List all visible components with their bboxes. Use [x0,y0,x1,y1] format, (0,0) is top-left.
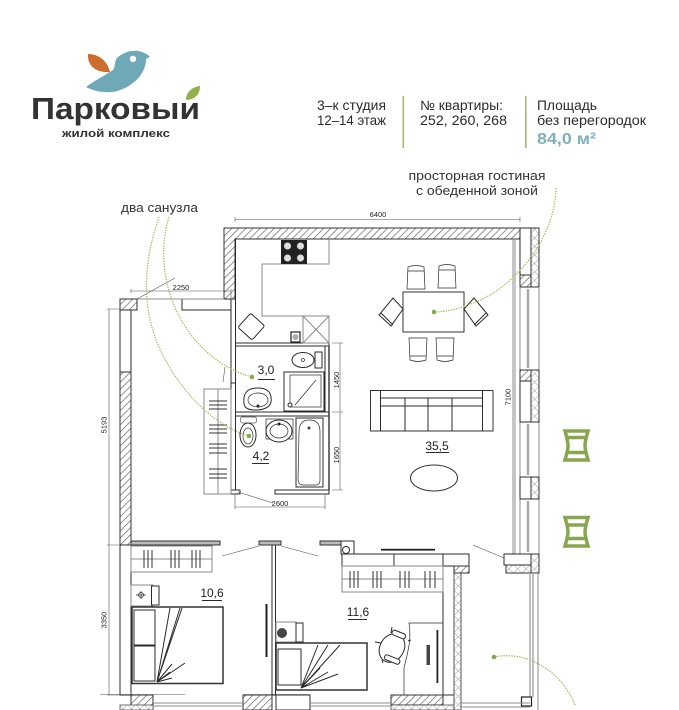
area value: 84,0 м² [537,131,596,148]
dimensions: 7100 [504,389,512,405]
logo subtitle: жилой комплекс [61,128,170,140]
logo [31,51,201,140]
bedroom two furniture [276,549,443,695]
desk [404,623,443,695]
leader: bathroom two [164,217,254,379]
leader: balcony [492,655,575,705]
room areas: 4,2 [253,449,270,463]
office chair [374,627,411,667]
wardrobe [204,389,231,494]
right facade piers and windows [153,228,539,710]
room areas: 11,6 [347,605,370,619]
basin lower [266,419,293,442]
dimensions: 3350 [100,612,108,628]
icon: window marker lower [565,518,588,546]
toilet lower [240,417,256,447]
type and floor: 3–к студия [317,98,386,113]
logo bird [86,51,150,92]
dimensions: 5193 [100,417,108,433]
coffee table [410,465,458,491]
header info: 12–14 этаж [317,113,386,128]
callout: bathrooms: два санузла [121,200,199,215]
callout: living room [408,168,546,198]
sofa [370,390,493,431]
logo orange leaf [88,54,110,72]
logo green leaf [186,86,200,100]
dimension labels: 6400 [370,210,386,219]
divider [525,96,527,148]
icon: hob [281,240,307,264]
header info: 252, 260, 268 [420,113,507,128]
header info: без перегородок [537,113,646,128]
basin upper [244,388,271,410]
floor plan [100,210,539,710]
mirror [266,604,268,657]
dimensions: 1450 [332,372,341,388]
room areas: 35,5 [425,439,449,453]
area: Площадь [537,98,597,113]
dimensions: 2250 [173,283,189,292]
room areas: 10,6 [200,586,224,600]
logo name: Парковый [31,91,200,126]
bathrooms [204,346,329,503]
dimensions: 1650 [332,447,341,463]
kitchen [238,239,329,343]
toilet upper [292,352,322,368]
walls [100,228,520,710]
room areas [200,363,449,620]
bathtub [296,418,323,487]
divider [402,96,404,148]
dimensions [100,210,520,695]
leader: living room [432,188,556,314]
header info [317,96,646,148]
callout: living room: просторная гостиная [408,168,546,183]
room areas: 3,0 [258,363,275,377]
bedroom one furniture [131,546,223,684]
leader: bathroom one [146,217,251,438]
dimensions: 2600 [272,499,288,508]
dining table with chairs [379,264,488,362]
callout: living room: с обеденной зоной [416,183,538,198]
apartment numbers: № квартиры: [420,98,503,113]
shower [284,372,324,411]
icon: window marker upper [565,431,588,460]
